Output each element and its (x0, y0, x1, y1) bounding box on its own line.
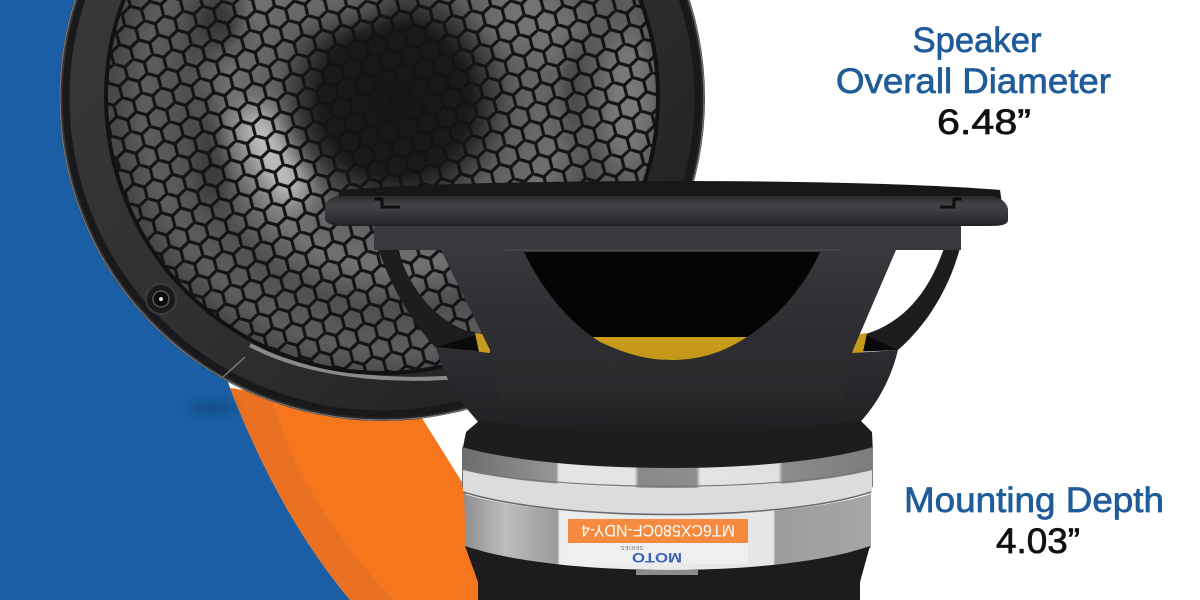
groove lines (463, 492, 871, 514)
label part number: MT6CX580CF-NDY-4 (581, 521, 735, 540)
orange swoosh (230, 388, 480, 600)
orange darker band (230, 388, 394, 600)
yellow cone (592, 337, 747, 360)
product label (568, 519, 748, 566)
flange top (336, 181, 1002, 204)
grille seat highlight (250, 345, 470, 379)
lower bowl (436, 347, 898, 436)
left basket arm (378, 248, 490, 352)
black base (465, 546, 870, 600)
depth value: 4.03” (996, 522, 1080, 561)
flange ring (325, 196, 1008, 226)
black neck (462, 420, 873, 472)
side-view driver (325, 181, 1008, 440)
window (524, 252, 820, 360)
heading line two: Overall Diameter (836, 62, 1111, 101)
flange tabs (374, 199, 400, 207)
metal band lower (464, 494, 871, 570)
text: speaker overall diameter (836, 21, 1111, 142)
text: mounting depth (904, 481, 1164, 561)
label series: SERIES (620, 544, 643, 550)
icon: mounting screw (146, 284, 176, 314)
heading line one: Speaker (912, 21, 1042, 60)
magnet motor (462, 420, 873, 600)
heading: Mounting Depth (904, 481, 1164, 520)
inner basket shadow (436, 335, 898, 352)
metal base rim (636, 570, 698, 575)
metal band top (462, 447, 873, 500)
blue panel (0, 0, 350, 600)
grille (100, 0, 670, 380)
front speaker with hexagon grille (59, 0, 705, 421)
label brand: MOTO (632, 550, 682, 566)
right basket arm (852, 248, 960, 352)
rim notch (223, 357, 245, 377)
cone surround left (475, 333, 490, 354)
window top line (505, 249, 840, 251)
metal band middle (463, 470, 872, 514)
diameter value: 6.48” (937, 103, 1031, 142)
basket body (374, 225, 961, 440)
speaker drop shadow (188, 402, 236, 414)
outer rim (59, 0, 705, 421)
cone surround right (852, 333, 867, 354)
cone highlights (200, 0, 651, 205)
